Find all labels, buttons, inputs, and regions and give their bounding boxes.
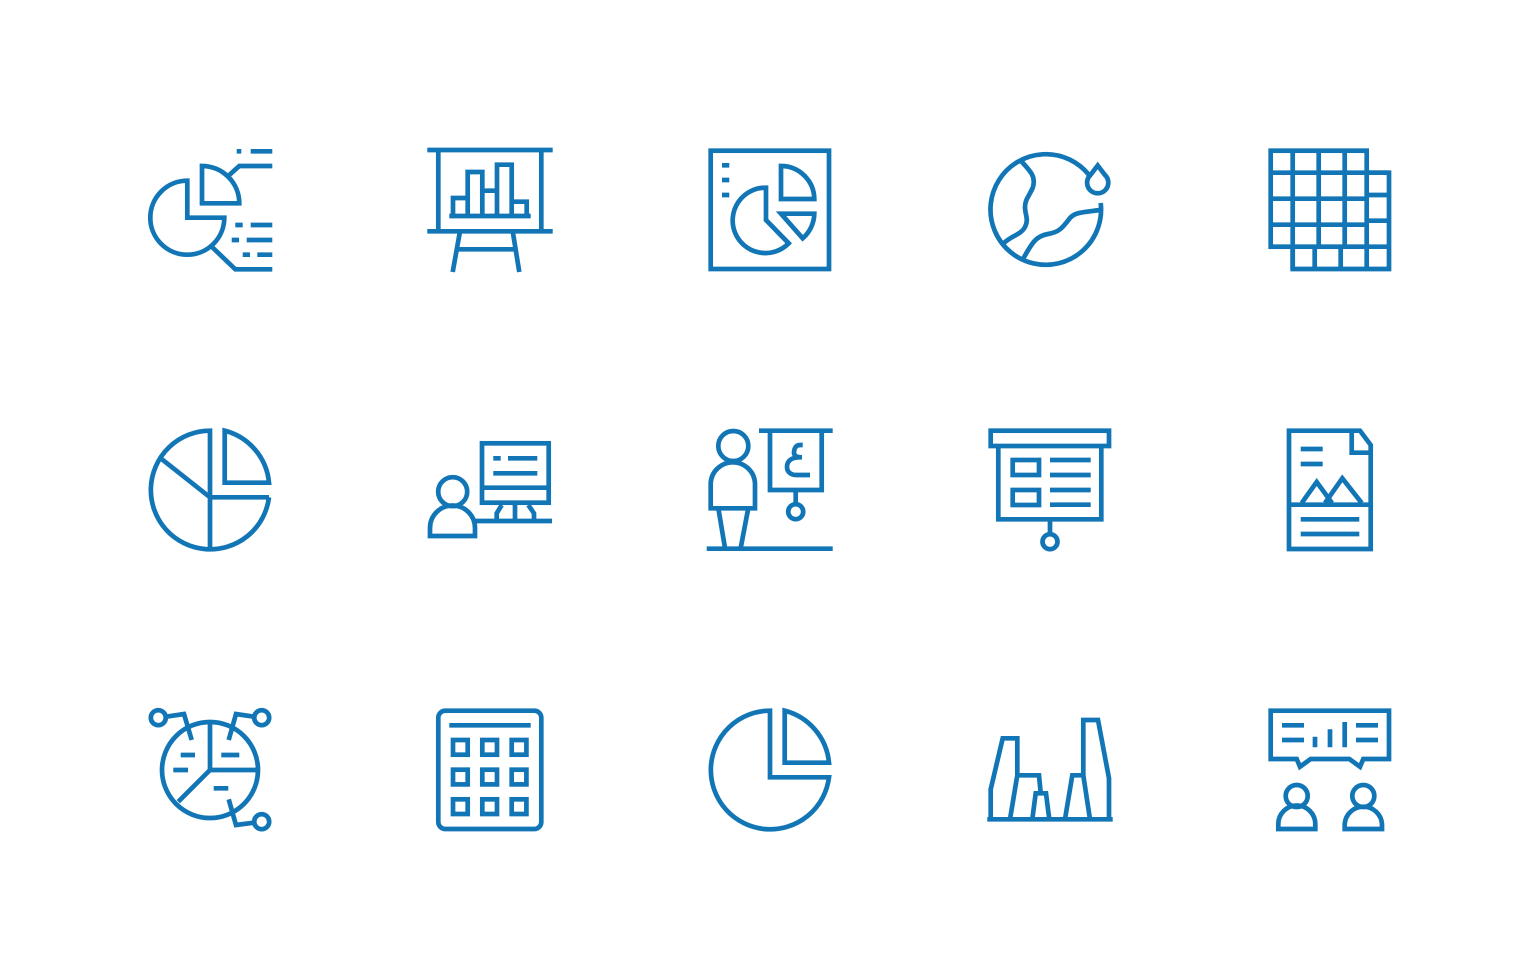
icon: pie chart with quarter slice	[711, 711, 829, 829]
icon: pie chart with connected nodes	[151, 710, 269, 829]
icon: exploded pie chart with callout lines	[150, 151, 272, 269]
icon: bar chart on easel board	[427, 150, 553, 272]
icon: overlapping table grids	[1271, 151, 1389, 269]
icon: area chart of tapered columns	[987, 720, 1113, 819]
icon: two people with chart speech bubble	[1271, 711, 1389, 829]
icon: person at desktop computer	[430, 443, 552, 536]
icon: presenter with pound-sign board	[707, 431, 833, 549]
icon: globe with water drop	[990, 154, 1108, 265]
icon: segmented pie chart	[151, 431, 269, 549]
icon: document with image	[1289, 431, 1371, 549]
icon: calendar table	[438, 711, 541, 829]
icon: projector screen with list	[991, 431, 1109, 549]
icon: pie chart report in square frame	[711, 151, 829, 269]
